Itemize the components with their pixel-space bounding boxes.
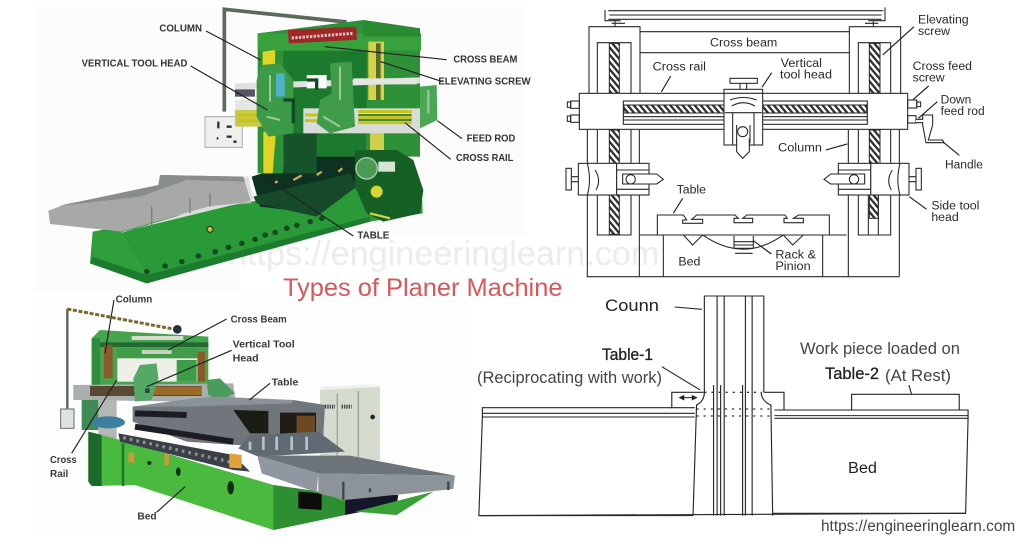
label: CROSS BEAM [325, 47, 517, 66]
label: Reciprocating with work: (Reciprocating with work) [477, 368, 662, 387]
label: Vertical Tool Head: Head [233, 354, 259, 365]
schematic labels: screw [913, 71, 945, 85]
table [657, 215, 829, 235]
bed [587, 235, 899, 277]
label: TABLE: TABLE [357, 231, 390, 242]
elevating screws [609, 43, 880, 234]
label: FEED ROD [437, 121, 515, 144]
leader arrows [662, 307, 911, 394]
electrical cabinet [320, 384, 380, 460]
label: Vertical Tool Head: Vertical Tool [233, 340, 295, 351]
label: Cross Rail: Rail [50, 469, 68, 480]
rail bolts [567, 100, 921, 123]
schematic labels: Table [677, 182, 706, 196]
overhead rod [224, 9, 347, 112]
label: Table-1: Table-1 [602, 346, 653, 364]
panel: column and double table side view [479, 296, 968, 516]
reciprocating arrow [680, 396, 697, 400]
label: VERTICAL TOOL HEAD: VERTICAL TOOL HEAD [82, 58, 187, 69]
bed [88, 432, 353, 530]
schematic labels: Bed [678, 254, 700, 268]
label: COLUMN [159, 24, 261, 60]
schematic labels [653, 12, 985, 273]
label: Bed: Bed [137, 512, 157, 523]
frame [92, 330, 208, 385]
bed [90, 187, 423, 283]
source url: https://engineeringlearn.com [821, 518, 1015, 535]
label: Cross Rail: Cross [50, 455, 77, 466]
label: Bed [137, 487, 185, 523]
cross beam [640, 32, 849, 53]
label: FEED ROD: FEED ROD [467, 133, 515, 144]
columns and cross beam [258, 20, 420, 173]
label: Cross Rail [50, 380, 117, 480]
label: COLUMN: COLUMN [159, 24, 202, 35]
schematic labels: Cross feed [913, 59, 972, 73]
schematic labels: Pinion [775, 259, 811, 273]
label: Column [105, 294, 152, 353]
label: CROSS RAIL: CROSS RAIL [456, 153, 513, 164]
schematic labels: feed rod [941, 104, 985, 118]
label: Cross Beam: Cross Beam [231, 314, 287, 325]
rail [73, 383, 235, 402]
table 1 [672, 392, 784, 410]
panel: green and grey planer photo with labels [38, 294, 465, 537]
label: ELEVATING SCREW [381, 62, 532, 88]
yellow ways [263, 50, 275, 80]
label: Cross Beam [168, 314, 287, 350]
watermark: https://engineeringlearn.com [228, 235, 659, 273]
label: Column: Column [116, 294, 152, 305]
table 2 [852, 394, 959, 410]
bed [479, 408, 968, 516]
schematic labels: Handle [945, 157, 983, 171]
label: CROSS BEAM: CROSS BEAM [453, 55, 517, 66]
sliding cover [257, 456, 318, 492]
label: Coumn: Counn [605, 297, 659, 315]
schematic labels: tool head [780, 68, 832, 82]
gear box [355, 150, 423, 222]
label: Table [249, 377, 299, 400]
table sliding covers [48, 175, 252, 232]
rack [118, 433, 250, 472]
dotted hidden lines [697, 392, 771, 416]
tool head [133, 363, 158, 402]
schematic labels: Cross rail [653, 59, 706, 73]
panel: green planer photo with labels [48, 9, 532, 283]
orange guard [229, 453, 242, 468]
label: ELEVATING SCREW: ELEVATING SCREW [438, 77, 532, 88]
name plate [288, 27, 357, 43]
left side tool head [566, 163, 663, 195]
label: CROSS RAIL [405, 123, 513, 164]
overhead rod [64, 309, 71, 408]
bed bolts [147, 218, 322, 272]
side column lower [82, 400, 98, 430]
control box [205, 117, 242, 147]
handle [916, 115, 944, 143]
label: Vertical Tool Head [147, 340, 295, 387]
label: TABLE [263, 177, 390, 242]
right side tool head [824, 163, 921, 195]
schematic labels: Vertical [781, 56, 822, 70]
table top [252, 154, 363, 213]
cross rail [235, 77, 420, 89]
schematic labels: Down [941, 92, 971, 106]
vertical tool heads [257, 63, 293, 137]
title: Types of Planer Machine [283, 274, 562, 302]
top rod [605, 7, 885, 27]
label: Work piece loaded on: Work piece loaded on [800, 339, 960, 358]
label: Table: Table [272, 377, 299, 388]
cross rail [579, 93, 908, 129]
right column [848, 27, 901, 277]
vertical tool head [724, 78, 763, 158]
column [693, 296, 773, 516]
grey table with work [133, 400, 325, 448]
pendant control [61, 409, 74, 428]
schematic labels: screw [918, 24, 950, 38]
schematic labels: Cross beam [710, 35, 777, 49]
label: At Rest: (At Rest) [885, 367, 951, 385]
schematic labels: Rack & [775, 247, 816, 261]
schematic labels: Column [778, 141, 822, 155]
label: VERTICAL TOOL HEAD [82, 58, 267, 110]
schematic labels: Elevating [918, 12, 969, 26]
schematic labels: Side tool [931, 198, 979, 212]
label: Bed: Bed [848, 460, 877, 477]
panel: schematic front view of planer [566, 7, 985, 277]
label: Table-2: Table-2 [825, 365, 879, 383]
left column [587, 27, 640, 277]
schematic labels: head [931, 210, 959, 224]
